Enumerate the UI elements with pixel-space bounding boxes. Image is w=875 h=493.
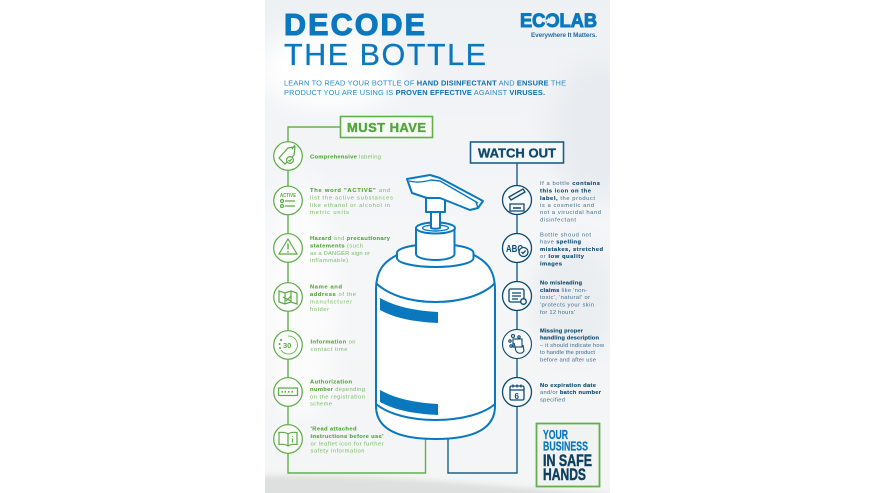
text: misleading claims: for 12 hours' (540, 310, 575, 316)
text: authorization number: on the registration (310, 394, 365, 400)
heading: watch out: WATCH OUT (478, 146, 556, 160)
logo: Ecolab: Everywhere It Matters. (531, 32, 597, 39)
text: spelling mistakes: have spelling (540, 240, 581, 246)
text: expiration date: specified (540, 398, 565, 404)
text: handling description (540, 328, 605, 364)
callout: your business in safe hands: IN SAFE (543, 451, 592, 470)
body curves (376, 283, 495, 420)
icon: active list (274, 186, 302, 215)
text: cosmetic icon: this icon on the (540, 188, 592, 194)
title: THE BOTTLE (284, 38, 486, 72)
text: name and address: address of the (310, 292, 356, 298)
pump head (407, 175, 483, 210)
icon: hazard triangle (274, 234, 302, 262)
text: handling description: to handle the product (540, 350, 595, 356)
text: misleading claims: toxic', 'natural' or (540, 295, 590, 301)
text: read instructions: safety information (310, 448, 364, 454)
text: active: The word "ACTIVE" and (310, 188, 390, 194)
intro text (284, 78, 566, 97)
text: read instructions: instructions before use' (310, 434, 384, 440)
icon: ABC with check (502, 234, 532, 262)
icon: cosmetic jar (502, 186, 532, 214)
text: name and address (310, 285, 356, 313)
text: handling description: Missing proper (540, 328, 584, 334)
icon: document with check (502, 282, 532, 310)
heading: watch out (470, 142, 564, 163)
text: hazard: as a DANGER sign or (310, 251, 370, 257)
text: hazard: statements (such (310, 244, 363, 250)
title: DECODE (284, 8, 425, 42)
text: read instructions (310, 426, 384, 454)
text: misleading claims: claims like 'non- (540, 288, 587, 294)
bottle body (376, 253, 495, 439)
icon: washing hands (502, 330, 532, 358)
title (284, 8, 486, 72)
blue connector line (448, 163, 517, 473)
text: handling description: before and after use (540, 358, 596, 364)
intro text: LEARN TO READ YOUR BOTTLE OF HAND DISINFECTANT AND ENSURE THE (284, 78, 566, 88)
text: cosmetic icon: If a bottle contains (540, 181, 600, 187)
text: contact time: contact time (310, 347, 348, 353)
pump neck (416, 228, 454, 260)
text: active: list the active substances (310, 196, 393, 202)
illustration: bottle (376, 175, 495, 439)
text: misleading claims: No misleading (540, 280, 582, 286)
callout: your business in safe hands: YOUR (543, 428, 568, 442)
text: contact time: Information on (310, 340, 356, 346)
text: misleading claims (540, 280, 594, 316)
icon: open leaflet (274, 425, 302, 453)
blue label bands (380, 298, 438, 415)
text: read instructions: or leaflet icon for further (310, 442, 384, 448)
page background (265, 0, 610, 493)
text: cosmetic icon (540, 181, 601, 224)
text: handling description: – it should indicate how (540, 343, 605, 349)
panel: watch out items (502, 181, 605, 406)
text: read instructions: 'Read attached (310, 426, 357, 432)
text: authorization number: Authorization (310, 380, 352, 386)
text: spelling mistakes: images (540, 262, 562, 268)
text: hazard: Hazard and precautionary (310, 236, 391, 242)
icon: map (274, 283, 302, 311)
icon: authorization number (274, 378, 302, 406)
icon: active list: ACTIVE (280, 193, 297, 199)
text: spelling mistakes: mistakes, stretched (540, 247, 603, 253)
text: expiration date: and/or batch number (540, 390, 602, 396)
text: active: like ethanol or alcohol in (310, 203, 390, 209)
text: authorization number: scheme (310, 402, 332, 408)
text: name and address: holder (310, 307, 329, 313)
text: authorization number (310, 380, 365, 408)
heading: must have: MUST HAVE (347, 120, 426, 135)
heading: must have (340, 116, 432, 138)
text: misleading claims: 'protects your skin (540, 302, 594, 308)
text: name and address: manufacturer (310, 300, 352, 306)
icon: ABC with check: ABC (506, 243, 523, 255)
icon: calendar: 6 (514, 392, 520, 401)
text: cosmetic icon: not a virucidal hand (540, 210, 601, 216)
icon: price tag with check (274, 142, 302, 170)
intro text: PRODUCT YOU ARE USING IS PROVEN EFFECTIVE AGAINST VIRUSES. (284, 88, 545, 97)
pump stem (431, 212, 440, 229)
green connector line (288, 127, 426, 473)
text: contact time (310, 340, 356, 353)
text: cosmetic icon: label, the product (540, 196, 595, 202)
text: spelling mistakes: Bottle shoud not (540, 232, 591, 238)
logo: Ecolab: ECOLAB (520, 10, 597, 32)
text: spelling mistakes (540, 232, 603, 268)
shoulder collar (397, 244, 474, 267)
text: name and address: Name and (310, 285, 342, 291)
text: handling description: handling description (540, 336, 599, 342)
callout: your business in safe hands: HANDS (543, 465, 586, 484)
text: active (310, 188, 393, 216)
text: hazard (310, 236, 391, 264)
text: cosmetic icon: is a cosmetic and (540, 203, 594, 209)
callout: your business in safe hands (536, 424, 600, 486)
icon: 30 timer: 30 (283, 341, 291, 350)
text: spelling mistakes: or low quality (540, 254, 585, 260)
icon: calendar (502, 378, 532, 406)
icon: 30 timer (274, 331, 302, 359)
text: expiration date: No expiration date (540, 383, 597, 389)
text: hazard: inflammable) (310, 258, 348, 264)
text: cosmetic icon: disinfectant (540, 218, 576, 224)
panel: must have items (274, 142, 393, 454)
callout: your business in safe hands: BUSINESS (543, 440, 588, 454)
text: authorization number: number depending (310, 387, 365, 393)
text: active: metric units (310, 210, 349, 216)
text: comprehensive labeling: Comprehensive labeling (310, 154, 381, 160)
text: expiration date (540, 383, 602, 404)
